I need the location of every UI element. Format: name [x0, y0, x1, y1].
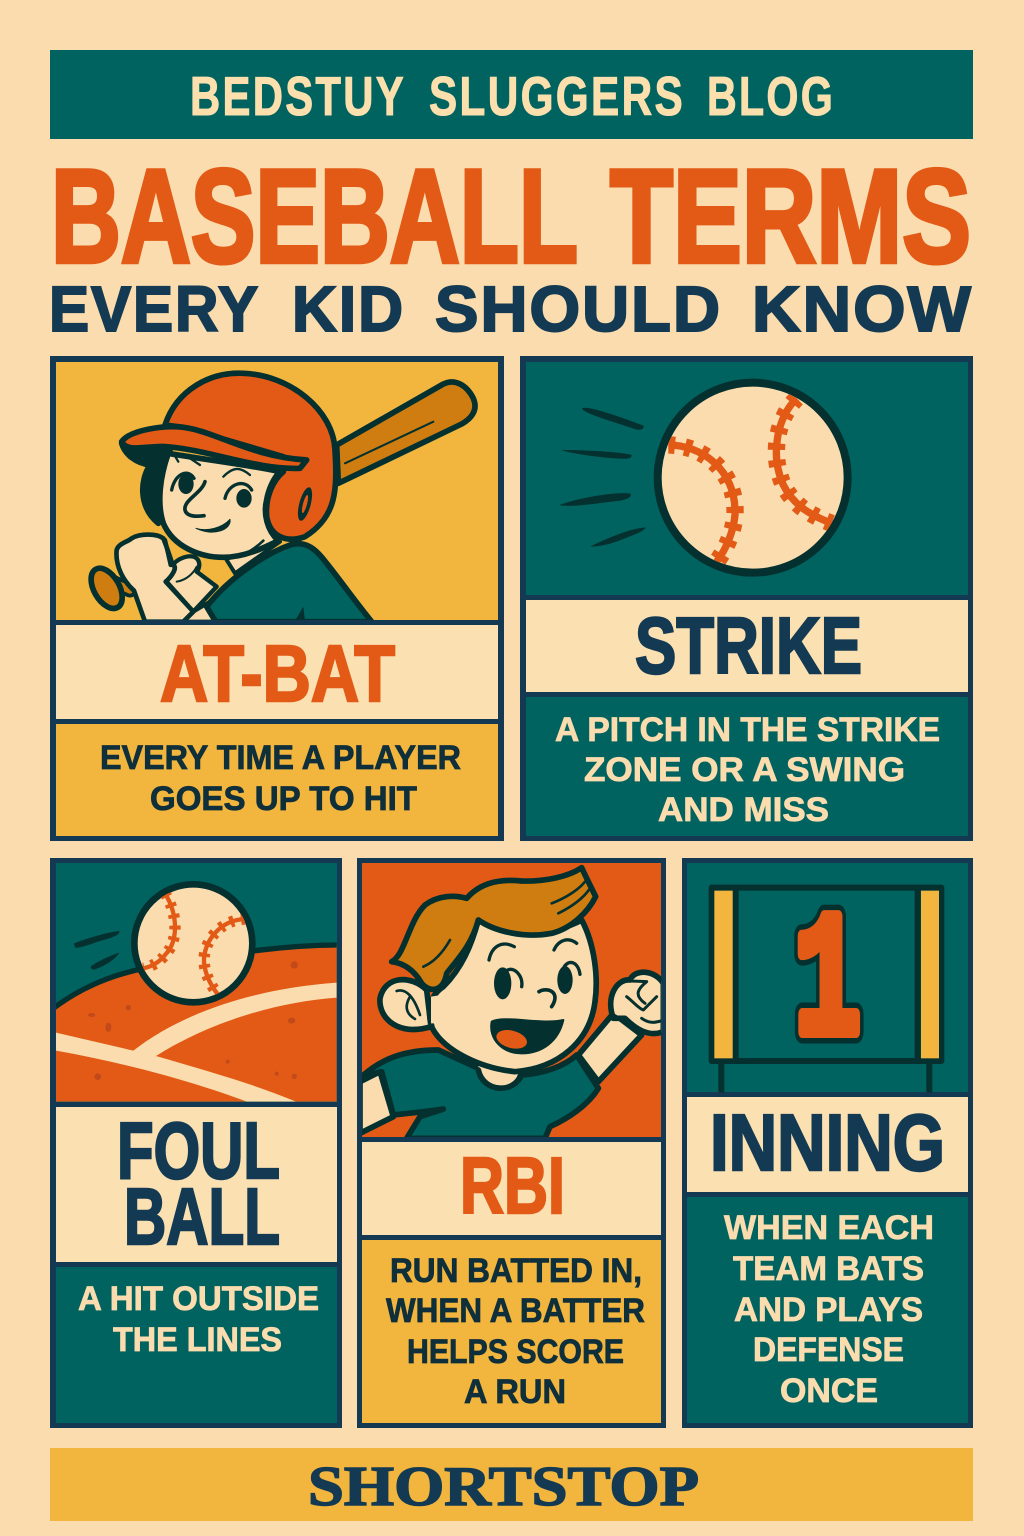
term label: strike: STRIKE — [635, 601, 862, 690]
scoreboard number — [794, 885, 861, 1085]
definition: inning: ONCE — [780, 1372, 878, 1410]
footer banner — [50, 1448, 973, 1521]
title: BASEBALL — [51, 143, 578, 291]
definition: at-bat: EVERY TIME A PLAYER — [100, 739, 461, 777]
scoreboard number: 1 — [794, 885, 861, 1085]
definition: strike: AND MISS — [658, 791, 829, 829]
term label: rbi — [362, 1141, 661, 1235]
panel: rbi — [357, 858, 666, 1428]
illustration: pitched baseball — [526, 362, 968, 595]
definition: strike: A PITCH IN THE STRIKE — [555, 711, 940, 749]
subtitle: KID — [292, 273, 405, 345]
panel: foul ball — [50, 858, 342, 1428]
illustration: ball over foul lines — [53, 863, 340, 1105]
definition: inning: TEAM BATS — [733, 1250, 924, 1288]
term label: inning: INNING — [710, 1098, 945, 1187]
definition: rbi: WHEN A BATTER — [386, 1292, 645, 1330]
scoreboard number: 1 — [794, 885, 861, 1085]
definition: rbi: RUN BATTED IN, — [390, 1252, 642, 1290]
term label: rbi: RBI — [460, 1141, 565, 1230]
illustration: boy batter — [56, 362, 498, 622]
subtitle — [49, 273, 973, 345]
panel: inning — [682, 858, 973, 1428]
term label: foul ball — [56, 1106, 337, 1262]
footer banner: SHORTSTOP — [308, 1456, 699, 1518]
panel: strike — [520, 356, 973, 841]
subtitle: SHOULD — [435, 273, 722, 345]
header banner: BEDSTUY — [190, 65, 406, 127]
definition: foul ball — [56, 1267, 337, 1423]
definition: inning — [687, 1197, 968, 1423]
definition: foul ball: A HIT OUTSIDE — [78, 1280, 319, 1318]
definition: at-bat: GOES UP TO HIT — [150, 780, 417, 818]
panel: at-bat — [50, 356, 504, 841]
header banner: SLUGGERS — [429, 65, 685, 127]
subtitle: EVERY — [49, 273, 260, 345]
definition: strike: ZONE OR A SWING — [584, 751, 905, 789]
term label: at-bat — [56, 625, 498, 719]
definition: inning: DEFENSE — [753, 1331, 904, 1369]
illustration: cheering boy — [360, 863, 663, 1138]
header banner: BLOG — [707, 65, 835, 127]
definition: rbi: A RUN — [464, 1373, 566, 1411]
definition: rbi — [362, 1240, 661, 1423]
definition: foul ball: THE LINES — [113, 1321, 282, 1359]
header banner — [50, 50, 973, 139]
term label: at-bat: AT-BAT — [160, 629, 395, 718]
definition: rbi: HELPS SCORE — [407, 1333, 624, 1371]
definition: at-bat — [56, 724, 498, 836]
definition: inning: WHEN EACH — [724, 1209, 934, 1247]
term label: foul ball: FOUL — [117, 1106, 280, 1195]
definition: strike — [526, 697, 968, 836]
subtitle: KNOW — [752, 273, 973, 345]
term label: strike — [526, 600, 968, 692]
illustration: scoreboard — [687, 863, 968, 1092]
term label: foul ball: BALL — [124, 1172, 280, 1261]
definition: inning: AND PLAYS — [734, 1291, 923, 1329]
